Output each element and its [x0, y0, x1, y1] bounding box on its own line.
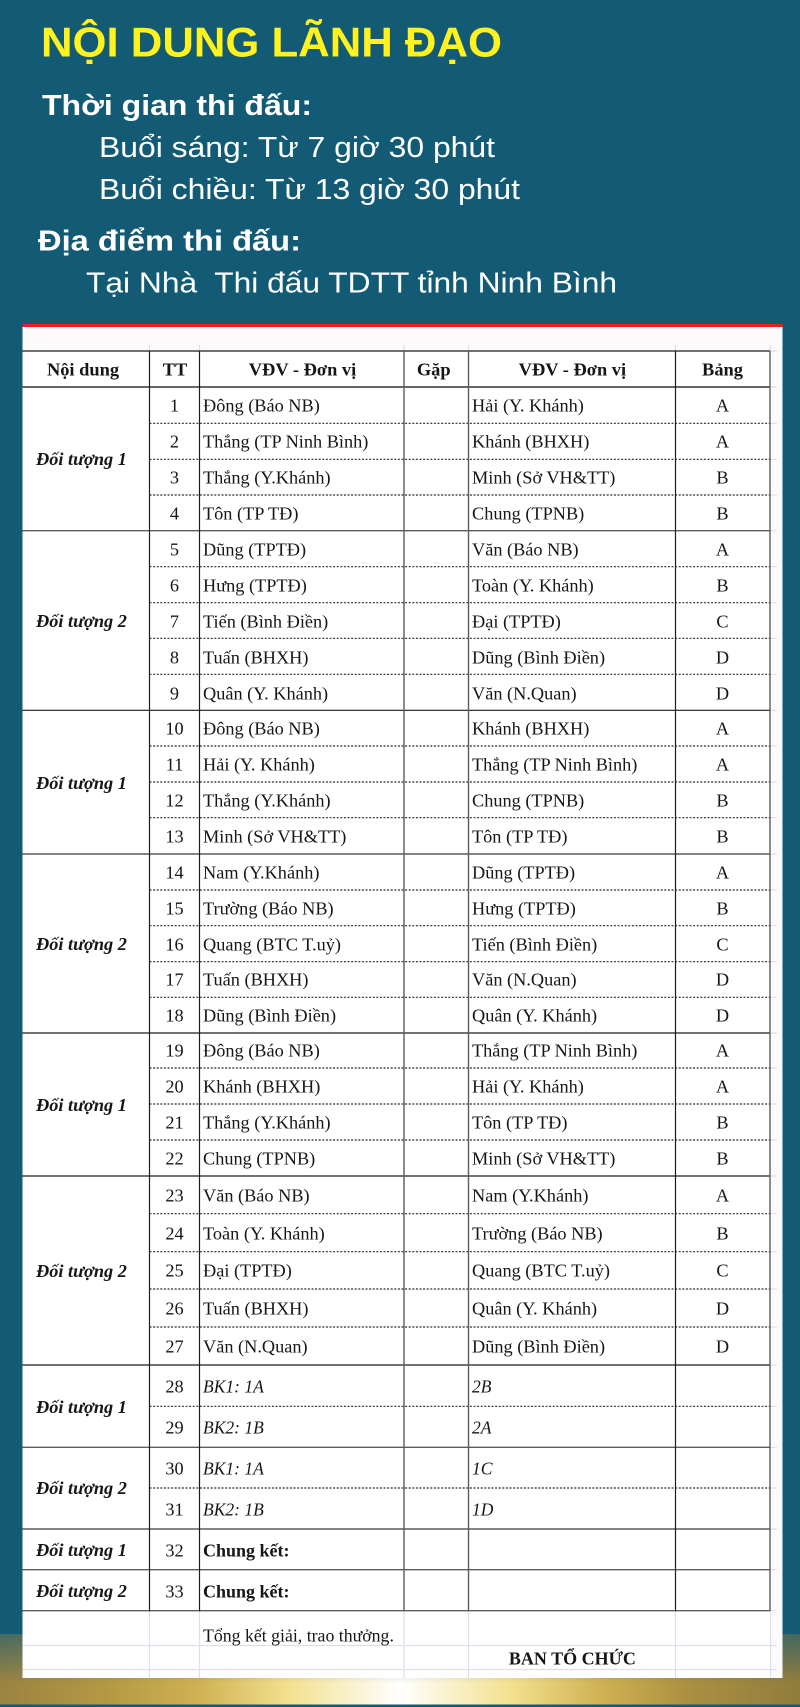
group label: Đối tượng 1: Đối tượng 1: [35, 1397, 127, 1417]
match 8: [170, 648, 729, 668]
match 14: Nam (Y.Khánh): [203, 862, 319, 884]
match 12: 12: [165, 790, 184, 810]
match 15: 15: [165, 898, 184, 918]
match 21: [165, 1112, 729, 1134]
match 26: 26: [165, 1298, 184, 1318]
heading: competition venue: Địa điểm thi đấu:: [38, 226, 301, 258]
match 6: 6: [170, 576, 179, 596]
match 10: 10: [165, 718, 184, 738]
match 7: 7: [170, 612, 179, 632]
match 31: 31: [165, 1500, 184, 1520]
group label: Đối tượng 2: Đối tượng 2: [35, 611, 127, 631]
match 9: 9: [170, 684, 179, 704]
match 19: Thắng (TP Ninh Bình): [472, 1040, 637, 1062]
match 32: final: 32: [165, 1540, 184, 1560]
match 3: Minh (Sở VH&TT): [472, 468, 615, 488]
match 33: final: Chung kết:: [203, 1582, 290, 1602]
table header row: Bảng: [702, 360, 744, 380]
match 12: [165, 790, 729, 812]
match 19: [165, 1040, 730, 1062]
table header row: Nội dung: [47, 360, 120, 380]
match 22: Minh (Sở VH&TT): [472, 1148, 615, 1170]
match 13: 13: [165, 826, 184, 846]
match 21: 21: [165, 1112, 184, 1132]
table header row: TT: [163, 360, 187, 380]
group label: Đối tượng 1: Đối tượng 1: [35, 449, 127, 469]
match 15: Hưng (TPTĐ): [472, 898, 576, 920]
match 31: BK2: 1B: [203, 1500, 264, 1520]
match 4: 4: [170, 504, 179, 524]
match 4: [170, 504, 729, 524]
match 21: Tôn (TP TĐ): [472, 1112, 567, 1134]
match 6: B: [716, 576, 729, 596]
match 24: Toàn (Y. Khánh): [203, 1224, 325, 1244]
match 22: [165, 1148, 729, 1170]
match 21: B: [716, 1112, 729, 1132]
match 7: Đại (TPTĐ): [472, 612, 561, 632]
match 5: Dũng (TPTĐ): [203, 540, 306, 560]
match 22: 22: [165, 1148, 184, 1168]
match 12: B: [716, 790, 729, 810]
match 16: Quang (BTC T.uỷ): [203, 934, 341, 956]
match 7: C: [716, 612, 729, 632]
match 6: [170, 576, 729, 596]
match 23: A: [716, 1186, 730, 1206]
match 10: Đông (Báo NB): [203, 718, 320, 740]
match 22: Chung (TPNB): [203, 1148, 315, 1170]
match 2: Khánh (BHXH): [472, 432, 589, 452]
match 33: final: [165, 1582, 290, 1602]
match 20: [165, 1076, 730, 1098]
organizing committee signature: BAN TỔ CHỨC: [509, 1648, 636, 1668]
match 17: Tuấn (BHXH): [203, 970, 308, 990]
match 8: Dũng (Bình Điền): [472, 648, 605, 668]
panel: schedule table: [22, 324, 782, 1678]
match 30: [165, 1458, 493, 1478]
match 17: 17: [165, 970, 184, 990]
match 11: [166, 754, 730, 776]
match 18: Dũng (Bình Điền): [203, 1006, 336, 1026]
match 25: Đại (TPTĐ): [203, 1260, 292, 1282]
match 3: B: [716, 468, 729, 488]
match 1: [170, 396, 730, 416]
match 16: [165, 934, 729, 956]
match 14: Dũng (TPTĐ): [472, 862, 575, 884]
match 9: Quân (Y. Khánh): [203, 684, 328, 704]
match 14: 14: [165, 862, 184, 882]
group label: Đối tượng 1: Đối tượng 1: [35, 1540, 127, 1560]
match 11: A: [716, 754, 730, 774]
match 31: 1D: [472, 1500, 494, 1520]
match 4: Tôn (TP TĐ): [203, 504, 298, 524]
match 29: 29: [165, 1418, 184, 1438]
table header row: VĐV - Đơn vị: [249, 360, 356, 380]
match 10: Khánh (BHXH): [472, 718, 589, 740]
match 20: Hải (Y. Khánh): [472, 1076, 584, 1098]
match 31: [165, 1500, 494, 1520]
match 24: 24: [165, 1224, 184, 1244]
match 28: 28: [165, 1376, 184, 1396]
match 7: [170, 612, 729, 632]
match 27: 27: [165, 1336, 184, 1356]
match 4: Chung (TPNB): [472, 504, 584, 524]
match 18: D: [716, 1006, 729, 1026]
text: venue: Tại Nhà Thi đấu TDTT tỉnh Ninh Bình: [86, 268, 617, 300]
match 6: Toàn (Y. Khánh): [472, 576, 594, 596]
match 20: Khánh (BHXH): [203, 1076, 320, 1098]
match 25: Quang (BTC T.uỷ): [472, 1260, 610, 1282]
match 25: C: [716, 1260, 729, 1280]
match 23: Nam (Y.Khánh): [472, 1186, 588, 1206]
match 10: A: [716, 718, 730, 738]
match 18: Quân (Y. Khánh): [472, 1006, 597, 1026]
match 1: Hải (Y. Khánh): [472, 396, 584, 416]
match 29: BK2: 1B: [203, 1418, 264, 1438]
match 7: Tiến (Bình Điền): [203, 612, 328, 632]
match 15: B: [716, 898, 729, 918]
match 5: Văn (Báo NB): [472, 540, 579, 560]
match 5: [170, 540, 730, 560]
match 24: Trường (Báo NB): [472, 1224, 603, 1244]
match 5: A: [716, 540, 730, 560]
match 13: [165, 826, 729, 848]
match 30: 30: [165, 1458, 184, 1478]
table header row: VĐV - Đơn vị: [519, 360, 626, 380]
match 2: 2: [170, 432, 179, 452]
match 25: [165, 1260, 729, 1282]
gold footer band: [0, 1634, 800, 1704]
match 27: Văn (N.Quan): [203, 1336, 308, 1358]
match 11: Thắng (TP Ninh Bình): [472, 754, 637, 776]
match 2: A: [716, 432, 730, 452]
match 8: Tuấn (BHXH): [203, 648, 308, 668]
match 27: [165, 1336, 729, 1358]
group label: Đối tượng 2: Đối tượng 2: [35, 1581, 127, 1601]
match 26: Tuấn (BHXH): [203, 1298, 308, 1320]
match 32: final: Chung kết:: [203, 1540, 290, 1560]
match 9: [170, 684, 729, 704]
match 27: D: [716, 1336, 729, 1356]
match 17: D: [716, 970, 729, 990]
match 23: 23: [165, 1186, 184, 1206]
match 15: [165, 898, 729, 920]
match 3: Thắng (Y.Khánh): [203, 468, 331, 488]
match 26: [165, 1298, 729, 1320]
table header row: Gặp: [417, 360, 451, 380]
closing note: Tổng kết giải, trao thưởng.: [203, 1626, 394, 1646]
match 8: 8: [170, 648, 179, 668]
match 9: D: [716, 684, 729, 704]
match 16: 16: [165, 934, 184, 954]
match 13: Minh (Sở VH&TT): [203, 826, 346, 848]
match 28: 2B: [472, 1376, 492, 1396]
match 18: 18: [165, 1006, 184, 1026]
match 20: 20: [165, 1076, 184, 1096]
match 24: [165, 1224, 729, 1244]
group label: Đối tượng 1: Đối tượng 1: [35, 773, 127, 793]
match 3: 3: [170, 468, 179, 488]
match 24: B: [716, 1224, 729, 1244]
match 4: B: [716, 504, 729, 524]
match 12: Chung (TPNB): [472, 790, 584, 812]
match 1: A: [716, 396, 730, 416]
match 23: Văn (Báo NB): [203, 1186, 310, 1206]
text: morning session: Buổi sáng: Từ 7 giờ 30 phút: [99, 132, 495, 164]
match 32: final: [165, 1540, 290, 1560]
match 11: Hải (Y. Khánh): [203, 754, 315, 776]
match 19: A: [716, 1040, 730, 1060]
match 16: Tiến (Bình Điền): [472, 934, 597, 956]
match 28: [165, 1376, 492, 1396]
match 6: Hưng (TPTĐ): [203, 576, 307, 596]
group label: Đối tượng 2: Đối tượng 2: [35, 1261, 127, 1281]
match 28: BK1: 1A: [203, 1376, 264, 1396]
text: afternoon session: Buổi chiều: Từ 13 giờ 30 phút: [99, 174, 520, 206]
match 17: [165, 970, 729, 990]
match 3: [170, 468, 729, 488]
match 26: Quân (Y. Khánh): [472, 1298, 597, 1320]
match 1: 1: [170, 396, 179, 416]
table header row: [47, 360, 744, 380]
group label: Đối tượng 1: Đối tượng 1: [35, 1095, 127, 1115]
match 29: 2A: [472, 1418, 492, 1438]
match 15: Trường (Báo NB): [203, 898, 334, 920]
match 13: B: [716, 826, 729, 846]
match 20: A: [716, 1076, 730, 1096]
match 2: Thắng (TP Ninh Bình): [203, 432, 368, 452]
match 18: [165, 1006, 729, 1026]
match 9: Văn (N.Quan): [472, 684, 577, 704]
match 30: 1C: [472, 1458, 493, 1478]
match 19: Đông (Báo NB): [203, 1040, 320, 1062]
heading: competition time: Thời gian thi đấu:: [42, 90, 312, 122]
match 11: 11: [166, 754, 183, 774]
match 23: [165, 1186, 730, 1206]
match 26: D: [716, 1298, 729, 1318]
match 12: Thắng (Y.Khánh): [203, 790, 331, 812]
match 13: Tôn (TP TĐ): [472, 826, 567, 848]
match 22: B: [716, 1148, 729, 1168]
match 16: C: [716, 934, 729, 954]
match 33: final: 33: [165, 1582, 184, 1602]
title: NỘI DUNG LÃNH ĐẠO: [41, 18, 502, 66]
match 5: 5: [170, 540, 179, 560]
match 1: Đông (Báo NB): [203, 396, 320, 416]
match 10: [165, 718, 730, 740]
match 8: D: [716, 648, 729, 668]
group label: Đối tượng 2: Đối tượng 2: [35, 1478, 127, 1498]
match 21: Thắng (Y.Khánh): [203, 1112, 331, 1134]
match 30: BK1: 1A: [203, 1458, 264, 1478]
match 14: [165, 862, 730, 884]
match 27: Dũng (Bình Điền): [472, 1336, 605, 1358]
match 25: 25: [165, 1260, 184, 1280]
match 17: Văn (N.Quan): [472, 970, 577, 990]
match 14: A: [716, 862, 730, 882]
match 19: 19: [165, 1040, 184, 1060]
group label: Đối tượng 2: Đối tượng 2: [35, 934, 127, 954]
match 29: [165, 1418, 492, 1438]
match 2: [170, 432, 730, 452]
